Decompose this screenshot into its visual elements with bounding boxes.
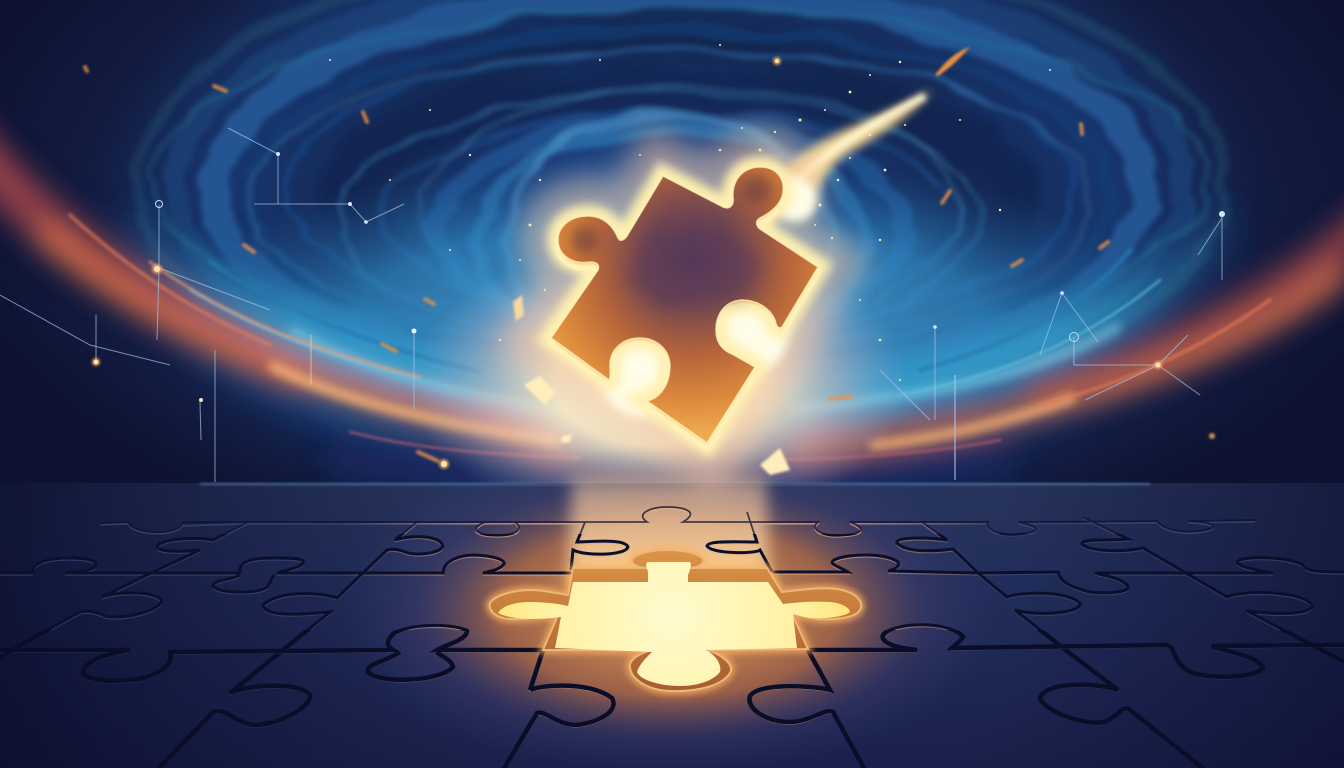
horizon line [200,483,1150,485]
knob shadows [572,176,771,253]
floor [0,445,1344,768]
puzzle seams [0,507,1344,768]
warm glow around hole [340,445,1000,768]
rim highlight [551,167,818,443]
empty slot with light [490,550,861,691]
flying piece fragments [513,295,790,475]
sky background with swirling vortex [0,0,1344,530]
bright light in sockets [602,178,817,416]
painted dark patch [625,225,765,310]
broad blue glow around piece [202,178,1144,454]
light beam above hole [568,478,770,585]
puzzle piece [551,167,818,448]
piece face [551,167,818,443]
constellation lines: right [880,215,1222,480]
constellation lines: left [0,128,414,482]
comet tail from piece [765,47,970,215]
central light glow [422,268,899,483]
piece outer glow [551,167,818,443]
painted streaks in the bands [70,215,1270,460]
peach halo [551,167,818,443]
glowing orange orbs and streaks [85,57,1225,469]
spark particles [329,44,1051,381]
swirl: blue rings [128,0,1231,362]
dark outer vignette [0,0,1344,484]
left and right horizon colour bands [0,130,1344,476]
